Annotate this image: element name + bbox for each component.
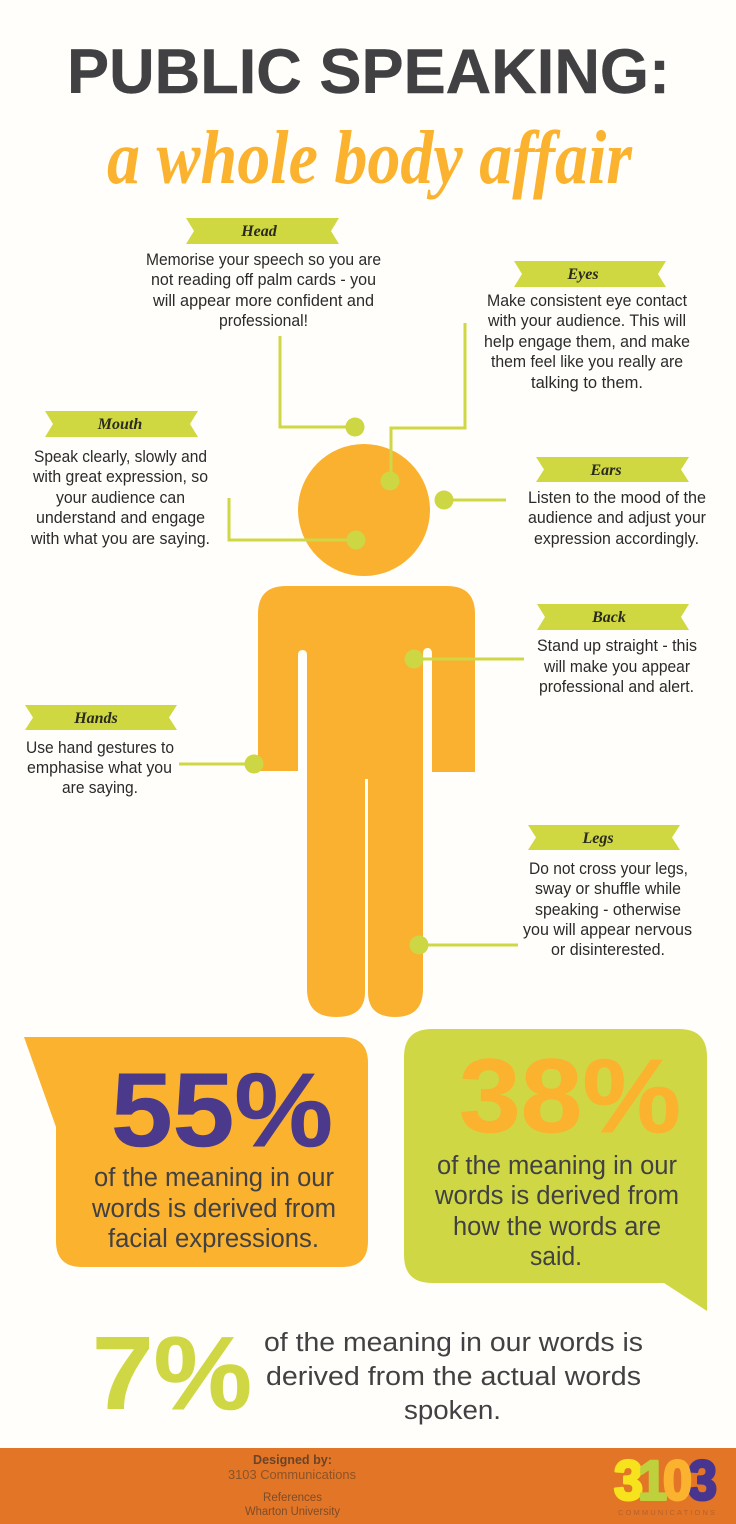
footer band (0, 1448, 736, 1524)
ribbon text: ears: Ears (589, 462, 622, 479)
connector: mouth (229, 498, 366, 550)
text block: back: Stand up straight - this (537, 637, 697, 655)
stat text: 55%: words is derived from (91, 1195, 336, 1223)
text block: back: professional and alert. (539, 678, 694, 696)
connector: ears (434, 490, 506, 510)
text block: head: not reading off palm cards - you (151, 271, 376, 289)
text block: hands (26, 739, 174, 797)
speech bubble: green (404, 1029, 707, 1311)
text block: legs (523, 860, 692, 959)
subtitle: a whole body affair (107, 116, 633, 200)
text block: eyes: with your audience. This will (487, 312, 686, 330)
text block: ears: expression accordingly. (534, 530, 699, 548)
title: PUBLIC SPEAKING: (67, 37, 670, 107)
stat text: 55%: facial expressions. (108, 1225, 319, 1253)
stat: 38%: 38% (459, 1038, 681, 1155)
text block: eyes (484, 292, 690, 392)
text block: eyes: Make consistent eye contact (487, 292, 687, 310)
ribbon: mouth (45, 411, 198, 437)
text block: head: professional! (219, 312, 308, 330)
text block: head: will appear more confident and (152, 292, 374, 310)
ribbon: head (186, 218, 339, 244)
panel: 7 percent (92, 1316, 643, 1432)
text block: hands: emphasise what you (27, 759, 172, 777)
connector: legs (410, 936, 518, 954)
text block: eyes: help engage them, and make (484, 333, 690, 351)
text block: hands: are saying. (62, 779, 138, 797)
stat text: 55%: of the meaning in our (94, 1164, 335, 1192)
stat: 7%: 7% (92, 1316, 252, 1432)
text block: legs: you will appear nervous (523, 921, 692, 939)
stat text: 38%: said. (530, 1243, 582, 1271)
text block: hands: Use hand gestures to (26, 739, 174, 757)
ribbon text: legs: Legs (581, 830, 614, 847)
text block: eyes: them feel like you really are (491, 353, 683, 371)
ribbon text: hands: Hands (73, 710, 118, 727)
panel: 38 percent (404, 1029, 707, 1311)
text block: legs: Do not cross your legs, (529, 860, 688, 878)
text block: ears: audience and adjust your (528, 509, 707, 527)
logo wordmark: COMMUNICATIONS (618, 1508, 715, 1517)
logo (614, 1448, 717, 1512)
footer (0, 1448, 736, 1524)
stat text: 7%: derived from the actual words (266, 1363, 641, 1391)
credits (228, 1453, 356, 1518)
logo: 0 (663, 1448, 692, 1512)
figure torso, arms and legs (258, 586, 475, 1017)
text block: mouth: Speak clearly, slowly and (34, 448, 207, 466)
credits: Designed by: (253, 1453, 332, 1467)
stat text: 38% (434, 1152, 679, 1271)
connector: hands (179, 754, 264, 774)
ribbon: legs (528, 825, 680, 850)
label: back (537, 604, 697, 696)
speech bubble: orange (24, 1037, 368, 1267)
text block: head (146, 251, 381, 330)
label: eyes (484, 261, 690, 392)
label: legs (523, 825, 692, 959)
text block: legs: speaking - otherwise (535, 901, 681, 919)
text block: mouth (30, 448, 210, 548)
connector: head (280, 336, 364, 436)
ribbon text: back: Back (591, 609, 626, 626)
text block: mouth: your audience can (56, 489, 185, 507)
text block: back: will make you appear (543, 658, 691, 676)
stat text: 7%: spoken. (404, 1397, 501, 1425)
text block: legs: or disinterested. (551, 941, 665, 959)
ribbon: ears (536, 457, 689, 482)
ribbon text: eyes: Eyes (566, 266, 599, 283)
text block: head: Memorise your speech so you are (146, 251, 381, 269)
label: head (146, 218, 381, 330)
label: ears (528, 457, 707, 548)
stat text: 55% (91, 1164, 336, 1253)
text block: ears (528, 489, 707, 548)
stat text: 7% (264, 1329, 643, 1425)
label: mouth (30, 411, 210, 548)
stat text: 38%: of the meaning in our (437, 1152, 678, 1180)
text block: mouth: understand and engage (36, 509, 205, 527)
credits: References (263, 1492, 322, 1504)
stat text: 38%: words is derived from (434, 1182, 679, 1210)
text block: ears: Listen to the mood of the (528, 489, 706, 507)
text block: eyes: talking to them. (531, 374, 643, 392)
panel: 55 percent (24, 1037, 368, 1267)
logo: 3 (688, 1448, 717, 1512)
text block: legs: sway or shuffle while (535, 880, 681, 898)
ribbon text: head: Head (240, 223, 278, 240)
text block: mouth: with what you are saying. (30, 530, 210, 548)
text block: mouth: with great expression, so (32, 468, 208, 486)
stat: 55%: 55% (111, 1052, 333, 1169)
figure head (298, 444, 430, 576)
text block: back (537, 637, 697, 696)
logo: 1 (638, 1448, 667, 1512)
credits: Wharton University (245, 1506, 340, 1518)
connector: eyes (380, 323, 465, 490)
connector: back (404, 650, 524, 668)
stat text: 7%: of the meaning in our words is (264, 1329, 643, 1357)
ribbon: hands (25, 705, 177, 730)
label: hands (25, 705, 177, 797)
stat text: 38%: how the words are (453, 1213, 661, 1241)
ribbon: back (537, 604, 689, 630)
figure: body (258, 444, 475, 1017)
logo: 3 (614, 1448, 643, 1512)
ribbon: eyes (514, 261, 666, 287)
credits: 3103 Communications (228, 1468, 356, 1482)
ribbon text: mouth: Mouth (97, 416, 142, 433)
